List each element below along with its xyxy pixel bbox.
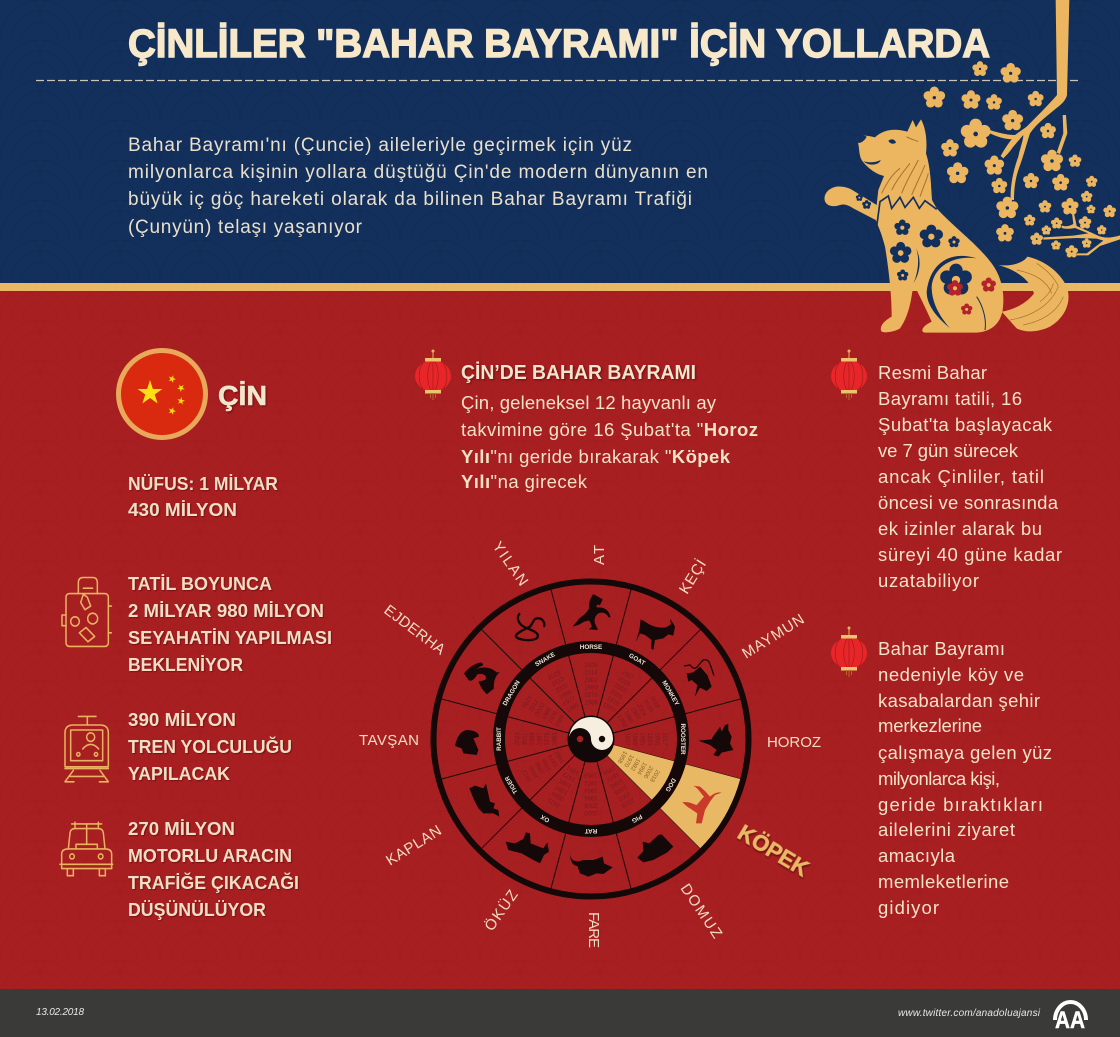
text: migration	[878, 638, 1052, 918]
year columns: 2003	[613, 683, 628, 695]
inner ring	[499, 647, 683, 831]
text: migration: ailelerini ziyaret	[878, 819, 1015, 840]
year columns: 2022	[522, 768, 534, 783]
zodiac labels: YILAN	[489, 539, 531, 589]
heading: spring festival: ÇİN’DE BAHAR BAYRAMI	[461, 361, 696, 384]
stat: train journeys	[128, 710, 292, 784]
animal: horse	[573, 594, 611, 630]
footer bar	[0, 989, 1120, 1037]
stat: motor vehicles	[128, 819, 299, 920]
animal: snake	[516, 613, 544, 640]
dog mane zigzag	[877, 196, 937, 227]
ring labels: DRAGON	[502, 679, 522, 707]
year columns: 2001	[555, 683, 570, 695]
label: dog highlighted: KÖPEK	[733, 820, 813, 882]
year columns: 1958	[615, 749, 628, 765]
year columns: 2020	[584, 809, 598, 815]
text: official holiday: uzatabiliyor	[878, 570, 979, 591]
stat: motor vehicles: MOTORLU ARACIN	[128, 846, 292, 866]
text: official holiday	[878, 362, 1062, 591]
logo: Anadolu Agency: AA	[1055, 1007, 1085, 1034]
dog face and fur details	[857, 135, 977, 328]
year columns: 1984	[584, 786, 598, 792]
year columns: 1995	[612, 783, 627, 795]
stat: population	[128, 474, 278, 520]
text: migration: amacıyla	[878, 845, 956, 866]
highlighted dog sector	[605, 744, 742, 849]
animal: rat	[570, 854, 613, 877]
year columns: 1978	[584, 693, 598, 699]
text: migration: Bahar Bayramı	[878, 638, 1005, 659]
year columns: 1980	[622, 710, 635, 725]
year columns: 1997	[554, 783, 569, 795]
ring labels: DOG	[664, 777, 677, 793]
zodiac labels: KEÇİ	[675, 556, 710, 597]
intro paragraph: milyonlarca kişinin yollara düştüğü Çin'de modern dünyanın en	[128, 162, 708, 183]
zodiac animal silhouettes	[455, 594, 733, 877]
year columns: 2026	[584, 663, 598, 669]
year columns: 1972	[584, 779, 598, 785]
chart: zodiac wheel	[434, 582, 748, 896]
year columns: 1960	[584, 772, 598, 778]
zodiac labels	[359, 539, 821, 948]
text: zodiac year: Yılı"na girecek	[461, 471, 588, 492]
zodiac labels: KAPLAN	[383, 822, 445, 869]
year columns: 1987	[538, 732, 544, 746]
text: migration: geride bıraktıkları	[878, 794, 1043, 815]
year columns: 1962	[554, 749, 566, 764]
year columns: 1977	[562, 695, 577, 708]
icon: car	[60, 822, 113, 876]
text: official holiday: ek izinler alarak bu	[878, 518, 1042, 539]
animal: goat	[636, 618, 675, 650]
year columns: 1975	[545, 732, 551, 746]
intro paragraph: (Çunyün) telaşı yaşanıyor	[128, 217, 363, 238]
year columns: 1964	[554, 713, 567, 729]
icon: train	[65, 716, 108, 782]
illustration: golden dog	[825, 119, 1069, 333]
stat: population: 430 MİLYON	[128, 500, 237, 520]
text: zodiac year: Çin, geleneksel 12 hayvanlı ay	[461, 392, 717, 413]
year columns: 2016	[642, 699, 654, 714]
icon: lantern right top	[831, 350, 867, 400]
panel: red main background	[0, 285, 1120, 990]
year columns: 2004	[635, 703, 647, 718]
zodiac labels: AT	[591, 545, 608, 565]
ring labels: RAT	[585, 827, 597, 834]
year columns: 2011	[522, 732, 528, 745]
year columns: 1971	[605, 770, 620, 783]
animal: tiger	[469, 783, 499, 817]
text: migration: çalışmaya gelen yüz	[878, 742, 1052, 763]
stat: train journeys: TREN YOLCULUĞU	[128, 736, 292, 757]
year columns: 2028	[648, 695, 660, 710]
gold divider stripe	[0, 283, 1120, 291]
ring labels: SNAKE	[534, 651, 557, 668]
ring labels	[496, 644, 686, 834]
year columns: 1994	[635, 761, 647, 776]
ring labels: ROOSTER	[679, 723, 686, 755]
year columns: 1985	[558, 776, 573, 789]
animal: rabbit	[455, 730, 479, 755]
stat: travel	[128, 574, 332, 675]
year columns: 1969	[631, 732, 637, 746]
year columns: 1981	[638, 732, 644, 746]
ring labels: OX	[539, 813, 551, 824]
panel: navy header	[0, 0, 1120, 284]
title divider	[36, 80, 1081, 82]
animal: dragon	[464, 662, 500, 694]
ring labels: HORSE	[580, 644, 602, 651]
year columns: 1974	[547, 753, 560, 768]
text: official holiday: Şubat'ta başlayacak	[878, 414, 1053, 435]
text: migration: kasabalardan şehir	[878, 690, 1040, 711]
year columns: 1999	[530, 732, 536, 746]
wheel sector lines	[440, 588, 742, 890]
year columns: 2015	[616, 676, 632, 689]
text: official holiday: ve 7 gün sürecek	[878, 440, 1019, 461]
intro paragraph: Bahar Bayramı'nı (Çuncie) aileleriyle geçirmek için yüz	[128, 135, 632, 156]
text: official holiday: ancak Çinliler, tatil	[878, 466, 1044, 487]
text: migration: memleketlerine	[878, 871, 1009, 892]
date: 13.02.2018	[36, 1007, 84, 1018]
ring labels: PIG	[630, 812, 643, 824]
year columns: 1989	[558, 689, 574, 701]
text: migration: nedeniyle köy ve	[878, 664, 1024, 685]
year columns: 1990	[584, 686, 598, 692]
text: migration: merkezlerine	[878, 715, 982, 736]
stat: train journeys: YAPILACAK	[128, 764, 230, 784]
animal: ox	[506, 832, 549, 863]
year columns: 1963	[552, 732, 558, 746]
year columns: 1991	[609, 689, 624, 702]
flag: China	[116, 348, 208, 440]
text: official holiday: öncesi ve sonrasında	[878, 492, 1059, 513]
yin yang	[568, 716, 614, 762]
year columns: 1976	[548, 710, 560, 725]
year columns: 2018	[648, 768, 660, 783]
text: zodiac year: takvimine göre 16 Şubat'ta "Horoz	[461, 419, 758, 440]
year columns: 1967	[601, 702, 617, 715]
year columns: 1983	[608, 777, 624, 789]
intro paragraph: büyük iç göç hareketi olarak da bilinen Bahar Bayramı Trafiği	[128, 189, 692, 210]
year columns: 2006	[641, 764, 654, 780]
year columns: 2024	[522, 695, 534, 710]
year columns	[515, 663, 667, 815]
intro paragraph	[128, 135, 708, 238]
zodiac labels: DOMUZ	[677, 881, 725, 942]
year columns: 2000	[535, 702, 547, 717]
year columns: 1992	[629, 706, 641, 722]
year columns: 1982	[628, 757, 641, 772]
zodiac labels: ÖKÜZ	[481, 886, 522, 934]
year columns: 1986	[541, 756, 553, 772]
icon: lantern middle	[415, 350, 451, 400]
animal: rooster	[698, 724, 733, 757]
zodiac labels: FARE	[585, 912, 602, 948]
year columns: 1970	[622, 753, 634, 768]
year columns: 2005	[654, 732, 660, 746]
year columns: 2019	[620, 796, 635, 808]
text: zodiac year	[461, 392, 758, 492]
year columns: 1993	[646, 732, 652, 746]
animal: pig	[637, 834, 673, 862]
dog tail	[998, 257, 1069, 331]
ring labels: MONKEY	[660, 680, 681, 708]
year columns: 2013	[551, 676, 566, 688]
flag label: ÇİN	[218, 380, 267, 411]
stat: motor vehicles: TRAFİĞE ÇIKACAĞI	[128, 872, 299, 893]
illustration: blossom branch	[924, 0, 1120, 257]
dog body	[825, 119, 1003, 333]
year columns: 2008	[584, 802, 598, 808]
year columns: 2025	[547, 670, 562, 682]
animal: monkey	[684, 660, 714, 697]
year columns: 2023	[515, 732, 521, 746]
year columns: 1979	[605, 696, 620, 708]
text: official holiday: Bayramı tatili, 16	[878, 388, 1022, 409]
year columns: 1988	[541, 706, 554, 721]
year columns: 1998	[535, 760, 547, 775]
year columns: 2007	[616, 790, 631, 802]
year columns: 1959	[601, 764, 616, 776]
year columns: 2010	[528, 764, 540, 779]
year columns: 1961	[565, 763, 581, 776]
icon: lantern right bottom	[831, 626, 867, 677]
year columns: 2014	[584, 670, 598, 676]
stat: population: NÜFUS: 1 MİLYAR	[128, 474, 278, 494]
year columns: 1957	[624, 732, 630, 746]
outer ring	[434, 582, 748, 896]
animal: dog	[682, 786, 722, 823]
title: ÇİNLİLER "BAHAR BAYRAMI" İÇİN YOLLARDA	[128, 22, 990, 66]
stat: motor vehicles: DÜŞÜNÜLÜYOR	[128, 900, 266, 920]
year columns: 2002	[584, 678, 598, 684]
text: migration: gidiyor	[878, 897, 939, 918]
stat: travel: 2 MİLYAR 980 MİLYON	[128, 601, 324, 621]
year columns: 1965	[566, 702, 581, 714]
ring labels: GOAT	[627, 652, 646, 667]
year columns: 1966	[584, 700, 598, 706]
year columns: 1996	[584, 794, 598, 800]
year columns: 2027	[620, 670, 635, 682]
year columns: 1968	[616, 714, 628, 729]
ring labels: TIGER	[504, 774, 520, 795]
year columns: 1973	[562, 770, 577, 782]
year columns: 2021	[547, 796, 562, 808]
source url: www.twitter.com/anadoluajansi	[898, 1008, 1041, 1019]
zodiac labels: TAVŞAN	[359, 732, 419, 749]
stat: travel: TATİL BOYUNCA	[128, 574, 272, 594]
zodiac labels: HOROZ	[767, 734, 821, 751]
stat: travel: SEYAHATİN YAPILMASI	[128, 628, 332, 648]
year columns: 2009	[550, 789, 566, 802]
ring labels: RABBIT	[496, 727, 503, 751]
zodiac labels: MAYMUN	[739, 611, 807, 662]
text: official holiday: süreyi 40 güne kadar	[878, 544, 1062, 565]
stat: motor vehicles: 270 MİLYON	[128, 819, 235, 839]
year columns: 2017	[661, 732, 667, 746]
blossoms	[924, 61, 1116, 257]
dog flower markings	[856, 194, 996, 315]
text: zodiac year: Yılı"nı geride bırakarak "Köpek	[461, 446, 731, 467]
stat: train journeys: 390 MİLYON	[128, 710, 236, 730]
year columns: 2012	[528, 698, 541, 714]
text: official holiday: Resmi Bahar	[878, 362, 987, 383]
icon: suitcase	[62, 577, 111, 646]
text: migration: milyonlarca kişi,	[878, 768, 1000, 789]
stat: travel: BEKLENİYOR	[128, 655, 243, 675]
zodiac labels: EJDERHA	[381, 602, 448, 659]
